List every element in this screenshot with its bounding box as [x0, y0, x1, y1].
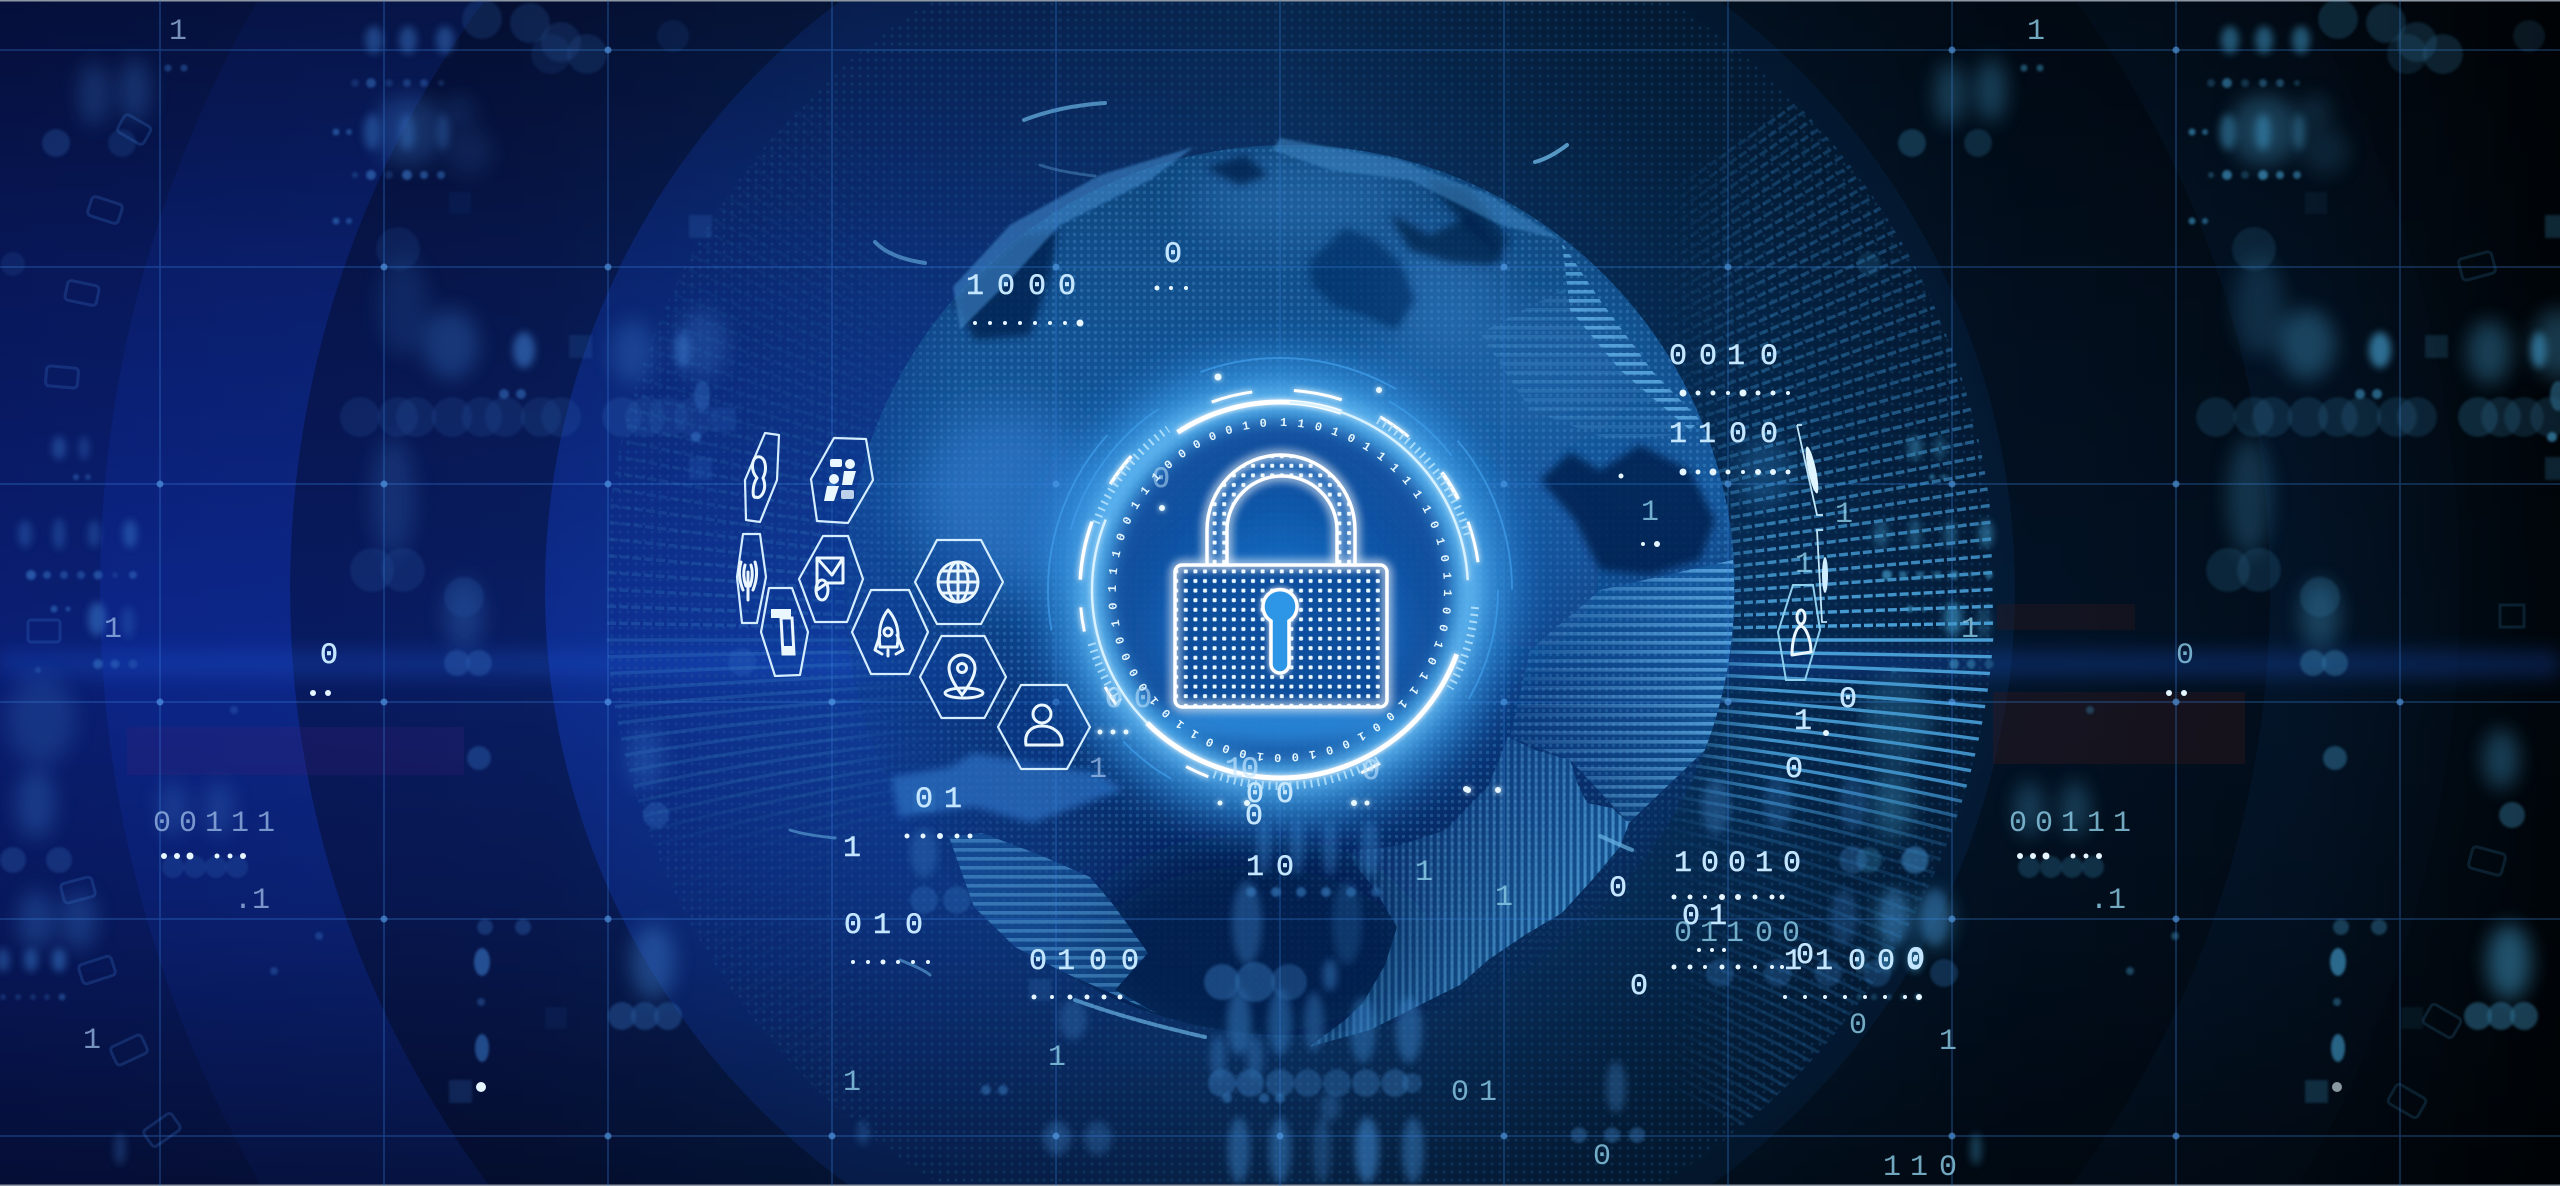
- binary digits: around globe: 1000: [966, 270, 1076, 304]
- dark seas: [953, 155, 1715, 575]
- bokeh cluster: right: [1852, 0, 2560, 1165]
- continent: lower right: [1309, 737, 1629, 1047]
- lock ring: arcs and ticks: [1048, 358, 1512, 822]
- continent ribbon: right: [1562, 243, 1700, 430]
- binary digits: around globe: 11000: [1784, 945, 1924, 979]
- binary digits: around globe: 0: [1609, 872, 1627, 906]
- binary digits: left field: .1: [234, 884, 270, 918]
- binary digits: right field: .1: [2090, 884, 2126, 918]
- binary digits: right field: 1: [2027, 15, 2045, 49]
- continent: lower left: [949, 833, 1156, 1013]
- padlock icon: [1175, 455, 1387, 707]
- binary digits: around globe: 01: [1682, 900, 1727, 934]
- binary digits: around globe: 00: [1246, 778, 1294, 812]
- binary digits: around globe: 1: [843, 832, 861, 866]
- binary digits: right field: 0: [2176, 639, 2194, 673]
- orbit streaks: [790, 103, 1632, 1037]
- padlock keyhole: [1263, 590, 1297, 673]
- lock ring: binary text circle: 1101011111101011001011100100100100011010000101110011100000100000000011011100000000: [1108, 418, 1452, 762]
- data dots rows: [161, 286, 2342, 1092]
- binary digits: around globe: 01: [1451, 1076, 1497, 1110]
- binary digits: around globe: 1: [1835, 498, 1853, 532]
- binary digits: around globe: 1: [1415, 856, 1433, 890]
- continent rim: upper left: [953, 147, 1194, 330]
- soft light patches on globe: [920, 160, 1630, 1050]
- binary digits: around globe: 1: [1048, 1041, 1066, 1075]
- binary digits: around globe: 0100: [1029, 945, 1139, 979]
- bokeh cluster: left: [0, 0, 756, 1165]
- binary digits: around globe: 0010: [1669, 340, 1778, 374]
- icon hexagon: mail: [799, 536, 863, 622]
- binary digits: left field: 1: [104, 613, 122, 647]
- binary digits: around globe: 1: [1495, 881, 1513, 915]
- icon hexagon: globe: [915, 540, 1003, 624]
- binary digits: left field: [83, 15, 338, 1058]
- binary digits: around globe: 0: [1849, 1009, 1867, 1043]
- continent rim: upper right: [1272, 138, 1562, 240]
- binary digits: around globe: 0: [1152, 463, 1170, 497]
- binary digits: around globe: 1: [1641, 496, 1659, 530]
- binary digits: right field: [1907, 15, 2194, 1059]
- binary digits: around globe: 01100: [1674, 917, 1800, 951]
- icon hexagon: cloud: [745, 433, 779, 522]
- binary digits: around globe: 0: [1362, 755, 1380, 789]
- binary digits: around globe: 110: [1883, 1151, 1957, 1185]
- binary digits: left field: 00111: [153, 807, 275, 841]
- binary digits: right field: 1: [1939, 1025, 1957, 1059]
- icon hexagon: location pin: [920, 636, 1006, 718]
- binary digits: right field: 0: [1907, 943, 1925, 977]
- binary digits: around globe: 10: [1225, 753, 1259, 787]
- outer dotted sphere: curved latitude lines: [600, 0, 2000, 1186]
- binary digits: around globe: 1: [1794, 705, 1812, 739]
- binary digits: right field: 00111: [2009, 807, 2131, 841]
- binary digits: around globe: 0: [1593, 1140, 1611, 1174]
- padlock body: [1175, 565, 1387, 707]
- binary digits: left field: 1: [169, 15, 187, 49]
- binary digits: left field: 0: [320, 639, 338, 673]
- binary digits: around globe: 0: [1785, 753, 1803, 787]
- side brackets and foreshortened icons, right: [1737, 425, 1828, 622]
- icon hexagon: rocket: [852, 590, 928, 674]
- binary digits: around globe: 0: [1164, 238, 1182, 272]
- binary digits: around globe: [843, 238, 1957, 1185]
- globe: dotted earth: [790, 103, 1735, 1050]
- binary digits: around globe: 0: [1839, 683, 1857, 717]
- binary digits: around globe: 0: [1796, 939, 1814, 973]
- icon hexagon: phone: [761, 588, 808, 676]
- binary digits: around globe: 1: [1795, 548, 1813, 582]
- glow behind lock ring: [1040, 350, 1520, 830]
- icon hexagon: signal tower: [737, 534, 766, 623]
- binary digits: around globe: 1: [1089, 753, 1107, 787]
- binary digits: around globe: 0: [1630, 970, 1648, 1004]
- bokeh cluster: lower centre: [857, 775, 1958, 1183]
- binary digits: around globe: 01: [915, 783, 962, 817]
- padlock shackle: [1207, 455, 1355, 566]
- binary digits: around globe: 0: [1245, 800, 1263, 834]
- binary digits: around globe: 1100: [1669, 418, 1778, 452]
- binary digits: around globe: 1: [843, 1066, 861, 1100]
- continent: left of ring: [891, 753, 1123, 823]
- icon hexagon: team: [811, 438, 873, 523]
- binary digits: right field: 1: [1961, 613, 1979, 647]
- binary digits: left field: 1: [83, 1024, 101, 1058]
- icon hexagon: right side person: [1778, 585, 1820, 680]
- binary digits: around globe: 10: [1246, 851, 1294, 885]
- right crescent ribbed: [1510, 560, 1734, 823]
- ring dots: [1098, 374, 1501, 806]
- lock ring: binary text circle: [1108, 418, 1452, 762]
- binary digits: around globe: 00: [1105, 683, 1152, 717]
- icon hexagon: person: [998, 685, 1090, 769]
- binary digits: around globe: 010: [844, 909, 923, 943]
- binary digits: around globe: 10010: [1674, 847, 1801, 881]
